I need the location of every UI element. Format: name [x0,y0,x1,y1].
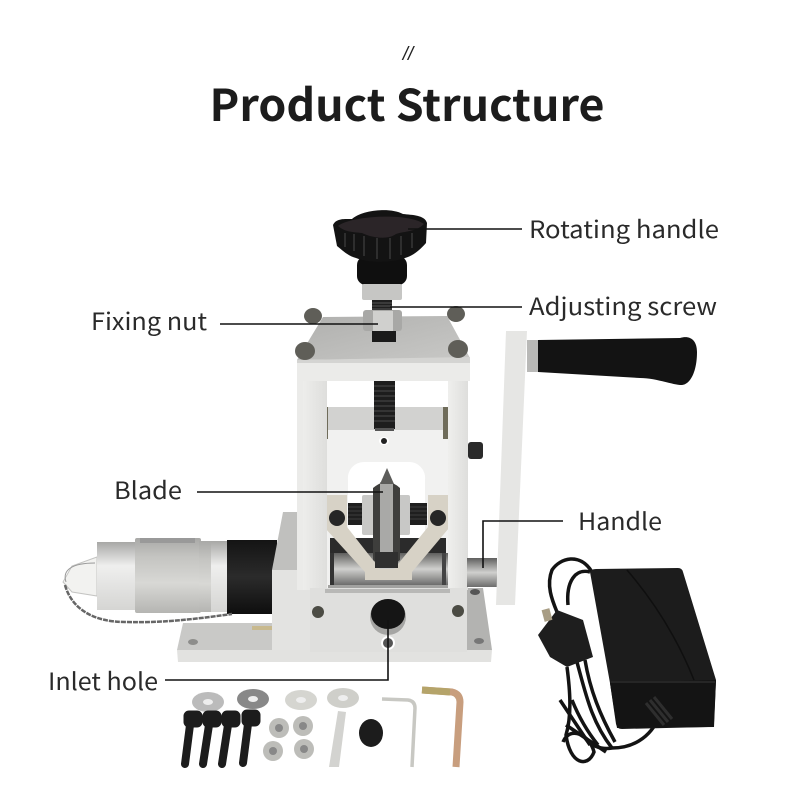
label: blade: Blade [114,471,182,506]
decorative mark: // [401,44,415,65]
steel pin [329,711,346,767]
black bolts [184,710,260,764]
label: inlet hole: Inlet hole [48,662,158,697]
label: rotating handle: Rotating handle [529,210,719,245]
top plate [297,316,470,381]
motor [63,538,277,630]
side bolt [468,442,483,459]
plate bolts [295,306,468,360]
rotating handle knob [333,210,427,311]
blade assembly [325,468,449,580]
roller shaft [328,538,448,591]
left post [300,380,327,590]
label: fixing nut: Fixing nut [91,302,207,337]
label: handle: Handle [578,502,662,537]
right post [448,380,468,590]
crank arm [496,331,527,605]
black screw [359,719,383,747]
inner frame block [323,407,448,588]
motor mount block [272,512,310,650]
V bracket [325,495,449,580]
leader lines [165,229,563,680]
hex nuts [263,716,314,761]
strain relief [646,697,672,725]
wire stripping machine [63,210,697,662]
lower housing [310,588,467,652]
crank grip [527,337,697,385]
base plate [177,588,492,662]
motor wire [65,585,232,622]
fixing nut [363,310,402,342]
blade disc [373,482,400,566]
washers [192,688,359,712]
large hex key [422,690,460,767]
power cord [549,559,660,762]
accessories [184,688,460,767]
power adapter [538,559,716,762]
title: Product Structure [210,70,604,134]
label: adjusting screw: Adjusting screw [529,287,717,322]
drive shaft [467,558,497,587]
adapter body [590,568,716,729]
lead screw [374,380,395,431]
plug [538,610,593,667]
small hex key [382,699,415,767]
